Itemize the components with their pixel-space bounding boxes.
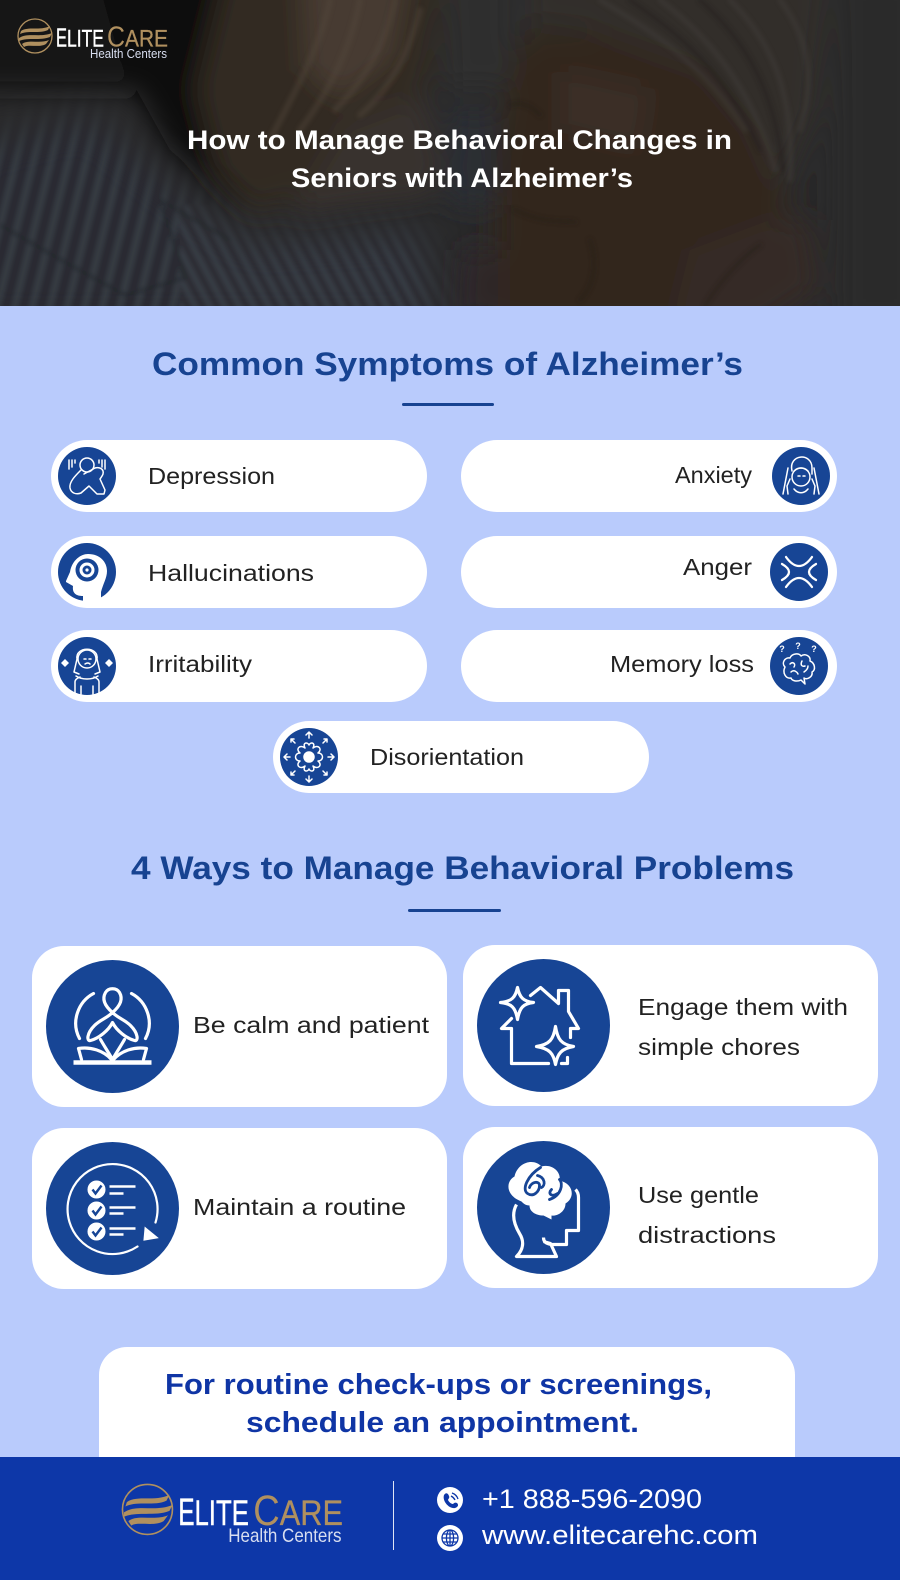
icon: checklist in circular arrow [68,1164,158,1254]
icon: head with target [66,554,107,603]
symptom: memory loss: Memory loss [610,651,754,677]
heading: common symptoms: Common Symptoms of Alzheimer’s [152,346,743,382]
icon: brain with arrows [284,732,334,782]
symptom: disorientation: Disorientation [370,744,524,770]
card: maintain a routine [32,1128,447,1289]
header logo: LITE [67,26,104,52]
footer logo: ARE [280,1494,343,1533]
symptom: irritability: Irritability [148,651,253,677]
footer logo: Health Centers [228,1526,341,1547]
symptom: anger: Anger [683,554,752,580]
card: maintain a routine: Maintain a routine [193,1194,406,1220]
card: engage with chores: Engage them with [638,994,848,1020]
header logo: ARE [125,26,168,52]
symptom: irritability [51,630,427,702]
icon: meditation [74,989,152,1062]
icon: globe [437,1525,463,1551]
icon: anger mark [782,557,816,587]
card: gentle distractions [463,1127,878,1288]
icon: irritated girl [61,649,113,694]
symptom: depression [51,440,427,512]
blurred base tones [0,0,810,306]
icon: brain with question marks: ? [795,641,801,651]
icon: brain with question marks: ? [779,644,785,654]
icon: sparkling house [500,988,578,1064]
call to action panel: schedule an appointment. [246,1407,639,1439]
icon: head with thought cloud [508,1162,578,1256]
symptom: anger [461,536,837,608]
footer logo [122,1484,343,1547]
icon: brain with question marks: ? [811,644,817,654]
header photo: two women, darkened [0,0,900,330]
heading: 4 ways: 4 Ways to Manage Behavioral Problems [131,850,794,886]
card: be calm and patient: Be calm and patient [193,1012,430,1038]
call to action panel: For routine check-ups or screenings, [165,1369,712,1401]
footer bar: +1 888-596-2090 [482,1484,702,1514]
symptom: anxiety [461,440,837,512]
footer bar [0,1457,900,1580]
icon: phone [437,1487,463,1513]
icon: person hugging knees [69,458,105,494]
footer bar: www.elitecarehc.com [481,1520,758,1550]
symptom: depression: Depression [148,463,275,489]
title: How to Manage Behavioral Changes in [187,125,732,155]
icon: brain with question marks [779,641,817,684]
symptom: memory loss [461,630,837,702]
symptom: anxiety: Anxiety [675,462,752,488]
hair strands [268,8,422,140]
card: gentle distractions: distractions [638,1222,776,1248]
card: be calm and patient [32,946,447,1107]
symptom: hallucinations: Hallucinations [148,560,314,586]
card: engage with chores [463,945,878,1106]
card: gentle distractions: Use gentle [638,1182,759,1208]
shirt of the left woman [0,116,442,306]
symptom: hallucinations [51,536,427,608]
footer logo: C [253,1487,280,1535]
footer logo: E [178,1491,194,1534]
title [187,125,732,193]
header logo [18,19,168,61]
header logo: C [107,22,125,54]
card: engage with chores: simple chores [638,1034,800,1060]
symptom: disorientation [273,721,649,793]
header logo: Health Centers [90,46,167,61]
call to action panel [99,1347,795,1457]
title: Seniors with Alzheimer’s [291,163,633,193]
heading: common symptoms [152,346,743,406]
footer logo: LITE [194,1494,249,1533]
icon: anxious woman holding head [783,457,819,494]
header logo: E [56,22,67,52]
heading: 4 ways [131,850,794,912]
